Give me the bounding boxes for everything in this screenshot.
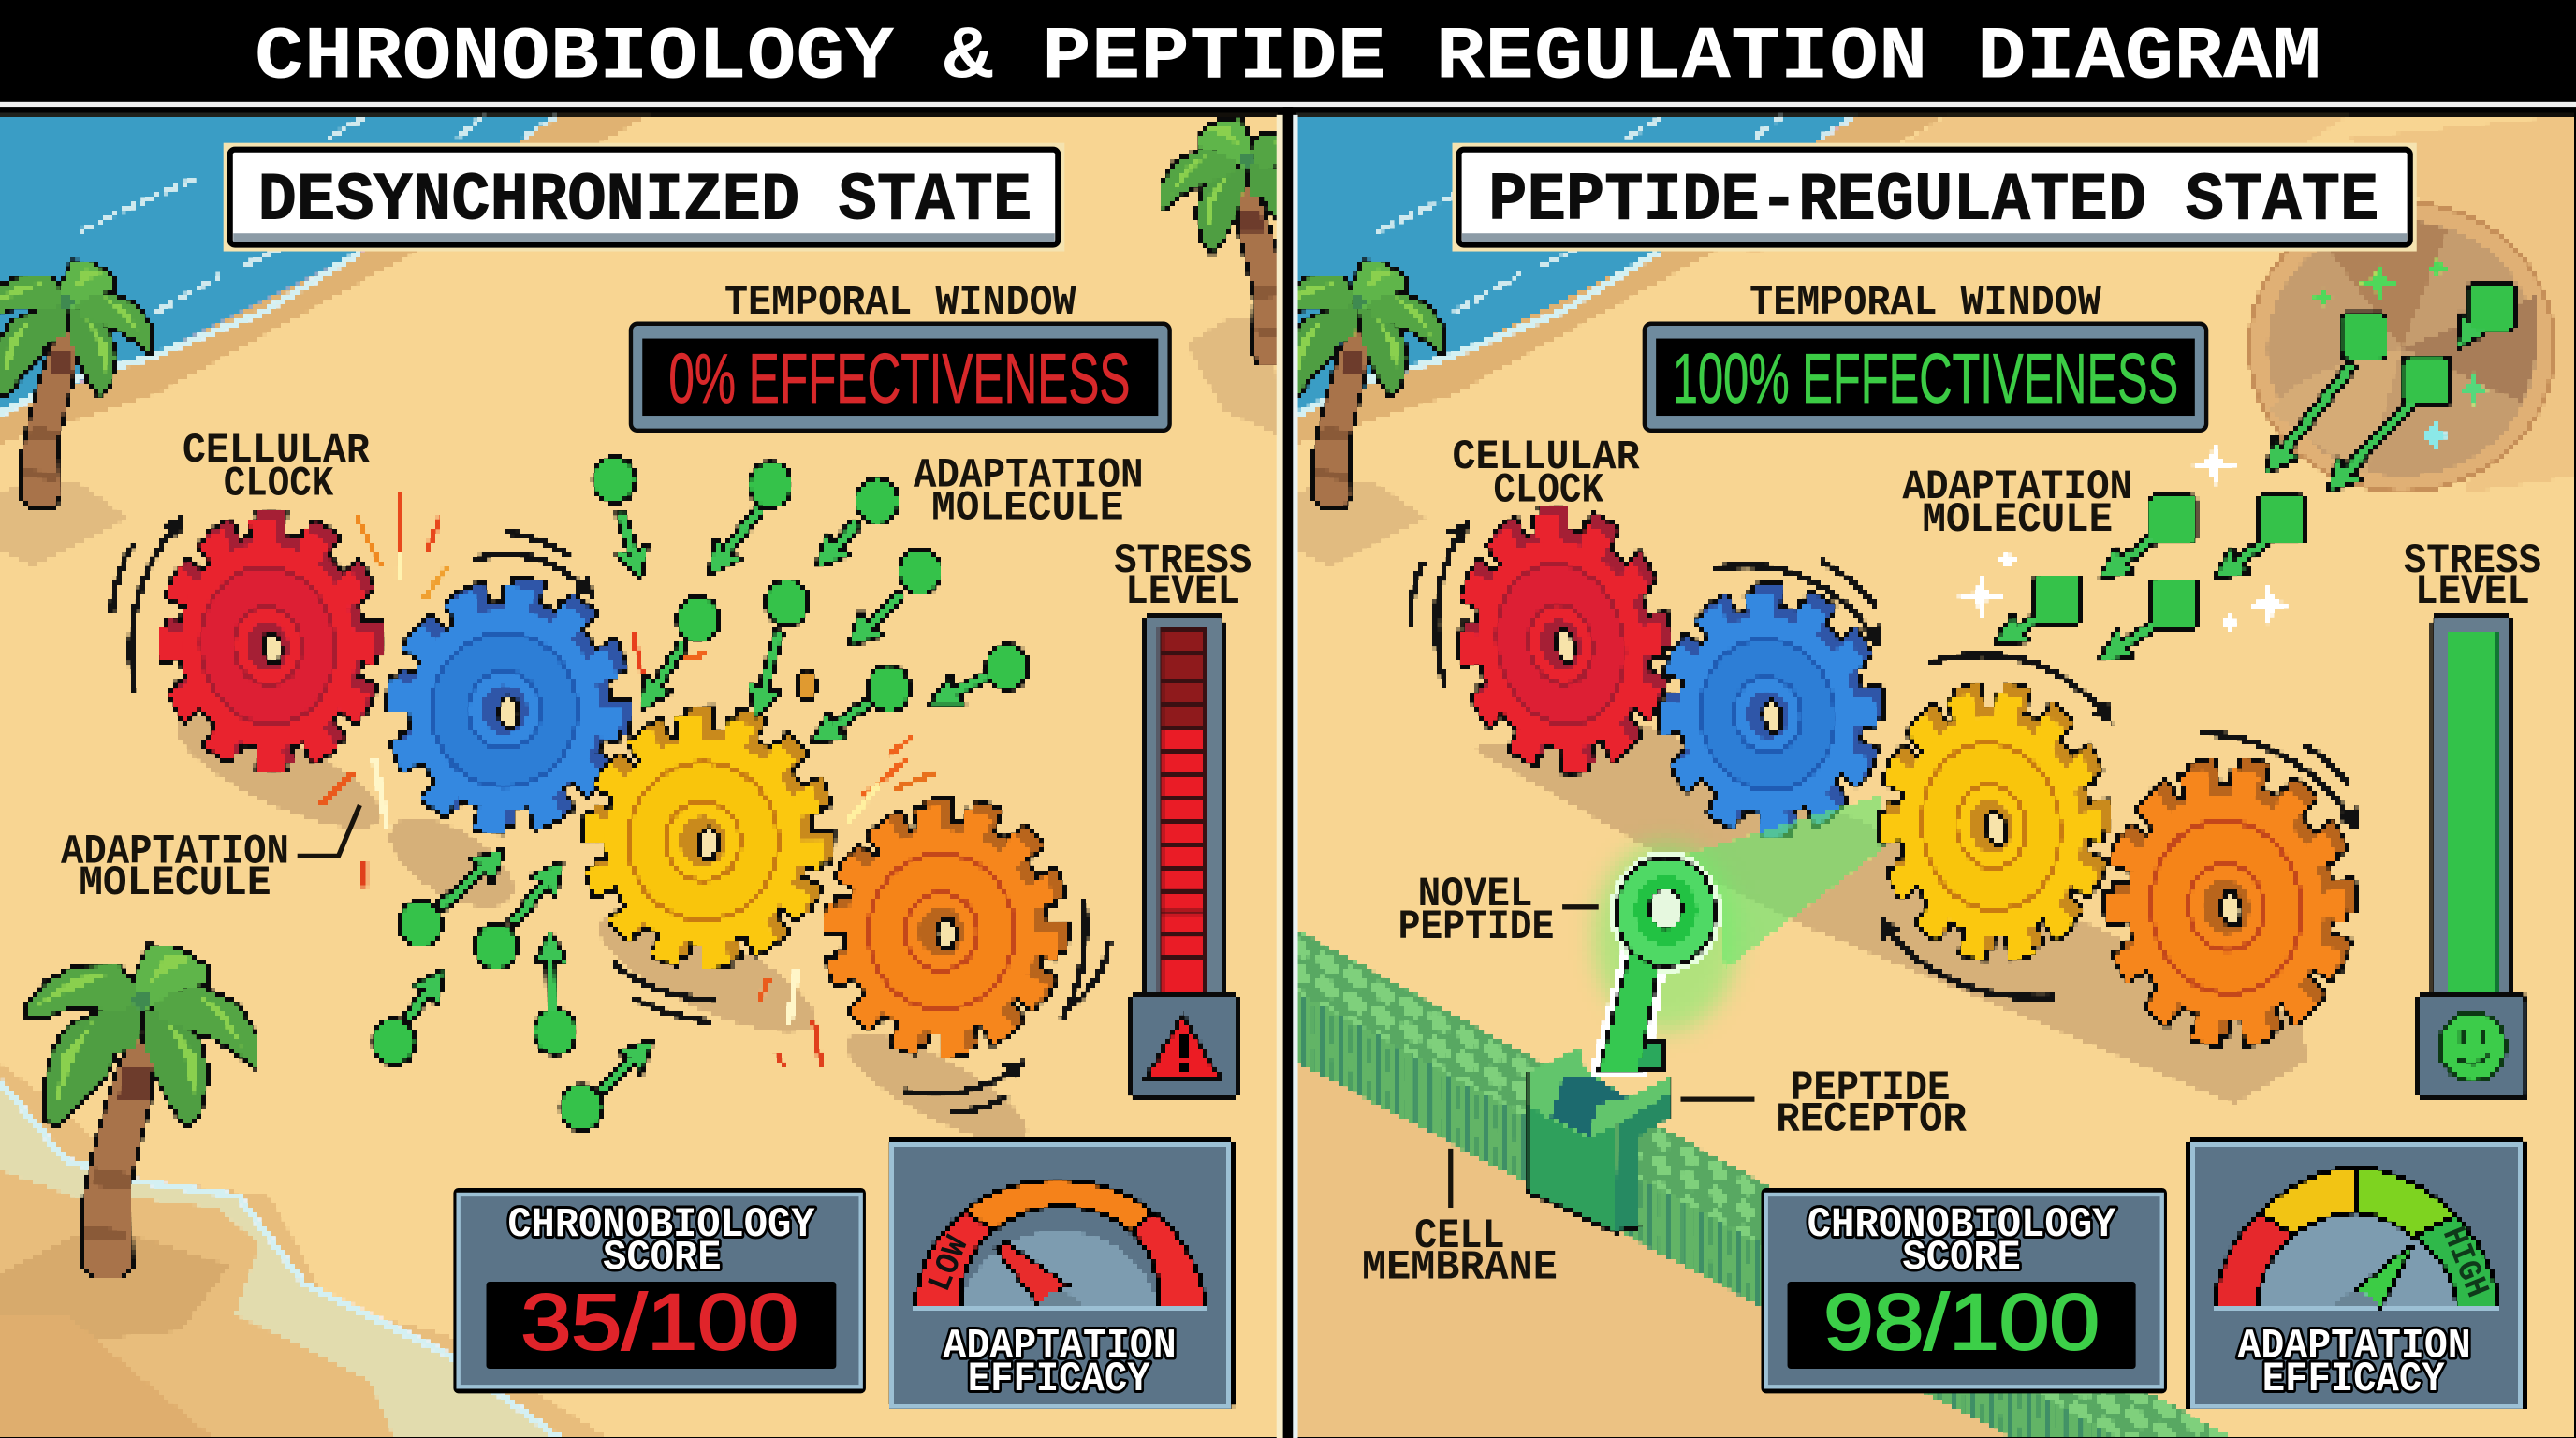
gear shadows left (164, 696, 1040, 1162)
gauge caption left: ADAPTATION (943, 1324, 1177, 1371)
adaptation efficacy dial right (2187, 1138, 2526, 1410)
panel divider (1277, 107, 1298, 1438)
gauge caption left: EFFICACY (968, 1357, 1150, 1403)
gear: yellow left (597, 722, 819, 953)
gear: blue right (1654, 583, 1889, 837)
cell membrane (1298, 930, 2232, 1438)
glow beam from peptide to gears (1676, 795, 1884, 970)
score panel right: 98/100 (1823, 1278, 2100, 1366)
gear: blue left (401, 594, 618, 819)
score panel right: CHRONOBIOLOGY (1808, 1202, 2116, 1249)
label: cellular clock left: CLOCK (224, 461, 333, 507)
score panel right: SCORE (1902, 1235, 2021, 1282)
label: temporal window left: TEMPORAL WINDOW (724, 280, 1076, 327)
sparkles right (1958, 255, 2491, 634)
thermometer: low stress (2419, 616, 2526, 1097)
label: peptide receptor (1680, 1065, 1967, 1144)
label: stress level left: STRESS (1114, 538, 1251, 585)
score panel right (1761, 1188, 2167, 1393)
title bar (0, 0, 2576, 107)
heading: peptide-regulated state (1453, 143, 2417, 252)
label: cellular clock right: CLOCK (1493, 467, 1603, 514)
label: novel peptide: PEPTIDE (1398, 904, 1554, 951)
gauge caption right (2237, 1324, 2471, 1403)
label: adaptation molecule top left: ADAPTATION (914, 453, 1144, 500)
gauge caption right: ADAPTATION (2237, 1324, 2471, 1371)
gear: yellow right (1877, 685, 2114, 958)
heading: peptide-regulated state: PEPTIDE-REGULATED STATE (1488, 162, 2378, 239)
adaptation efficacy dial left (887, 1138, 1234, 1410)
palm tree: right panel (1274, 262, 1442, 506)
label: adaptation molecule right: MOLECULE (1922, 497, 2113, 544)
display: 0% effectiveness (631, 324, 1170, 431)
motion arrows right (1411, 524, 2356, 998)
display: 100% effectiveness: 100% EFFECTIVENESS (1673, 339, 2178, 418)
label: cell membrane: MEMBRANE (1362, 1244, 1558, 1291)
label: peptide receptor: RECEPTOR (1776, 1097, 1967, 1144)
gear: orange left (838, 814, 1054, 1042)
pore / source crater (2249, 202, 2554, 492)
novel peptide key (1588, 842, 1738, 1078)
label: adaptation molecule right: ADAPTATION (1902, 464, 2132, 511)
label: adaptation molecule top left: MOLECULE (931, 486, 1123, 533)
palm tree: lower left (28, 946, 256, 1277)
adaptation molecules and arrows left (374, 459, 1027, 1129)
score panel left: 35/100 (520, 1278, 798, 1366)
palm tree: top right (1161, 117, 1277, 365)
gauge caption left (943, 1324, 1177, 1403)
label: stress level right: STRESS (2404, 538, 2541, 585)
label: stress level right (2404, 538, 2541, 616)
display: 100% effectiveness (1645, 324, 2206, 431)
gear: orange right (2102, 760, 2358, 1044)
panel art: peptide-regulated state (1274, 115, 2576, 1438)
label: adaptation molecule lower left: ADAPTATION (61, 829, 289, 875)
thermometer: high stress (1131, 616, 1237, 1097)
label: adaptation molecule top left (914, 453, 1144, 533)
label: adaptation molecule lower left: MOLECULE (79, 860, 271, 907)
label: cell membrane (1362, 1149, 1558, 1291)
display: 0% effectiveness: 0% EFFECTIVENESS (668, 339, 1131, 418)
label: stress level right: LEVEL (2415, 569, 2530, 616)
motion arrows left (111, 520, 1109, 1112)
gear shadow right (1471, 723, 2308, 1104)
collision sparks left (320, 490, 936, 1068)
label: stress level left: LEVEL (1125, 569, 1240, 616)
label: cellular clock left: CELLULAR (183, 428, 370, 475)
gauge label: high: HIGH (2434, 1222, 2496, 1303)
score panel left: SCORE (603, 1235, 721, 1282)
heading: desynchronized state: DESYNCHRONIZED STATE (258, 162, 1032, 239)
title bar: CHRONOBIOLOGY & PEPTIDE REGULATION DIAGRAM (255, 15, 2321, 99)
label: adaptation molecule right (1902, 464, 2132, 544)
beach background left (0, 115, 1278, 1438)
gauge caption right: EFFICACY (2262, 1357, 2445, 1403)
label: cellular clock right: CELLULAR (1453, 434, 1640, 481)
label: novel peptide (1398, 872, 1599, 951)
score panel left (453, 1188, 866, 1393)
gear: red right (1448, 504, 1680, 775)
label: adaptation molecule lower left (61, 805, 359, 907)
label: peptide receptor: PEPTIDE (1791, 1065, 1950, 1112)
peptide receptor (1526, 1047, 1671, 1232)
adaptation molecules and arrows right (2004, 285, 2513, 654)
heading: desynchronized state (224, 143, 1064, 252)
label: cellular clock left (183, 428, 370, 507)
label: temporal window right: TEMPORAL WINDOW (1749, 280, 2101, 327)
beach background right (1298, 115, 2576, 1438)
label: cellular clock right (1453, 434, 1640, 514)
gauge label: low: LOW (921, 1230, 977, 1297)
score panel left: CHRONOBIOLOGY (507, 1202, 815, 1249)
label: novel peptide: NOVEL (1418, 872, 1533, 918)
label: cell membrane: CELL (1414, 1213, 1505, 1260)
gear: red left (157, 513, 387, 770)
label: stress level left (1114, 538, 1251, 616)
panel art: desynchronized state (0, 115, 1330, 1438)
palm tree: top left (0, 262, 151, 506)
